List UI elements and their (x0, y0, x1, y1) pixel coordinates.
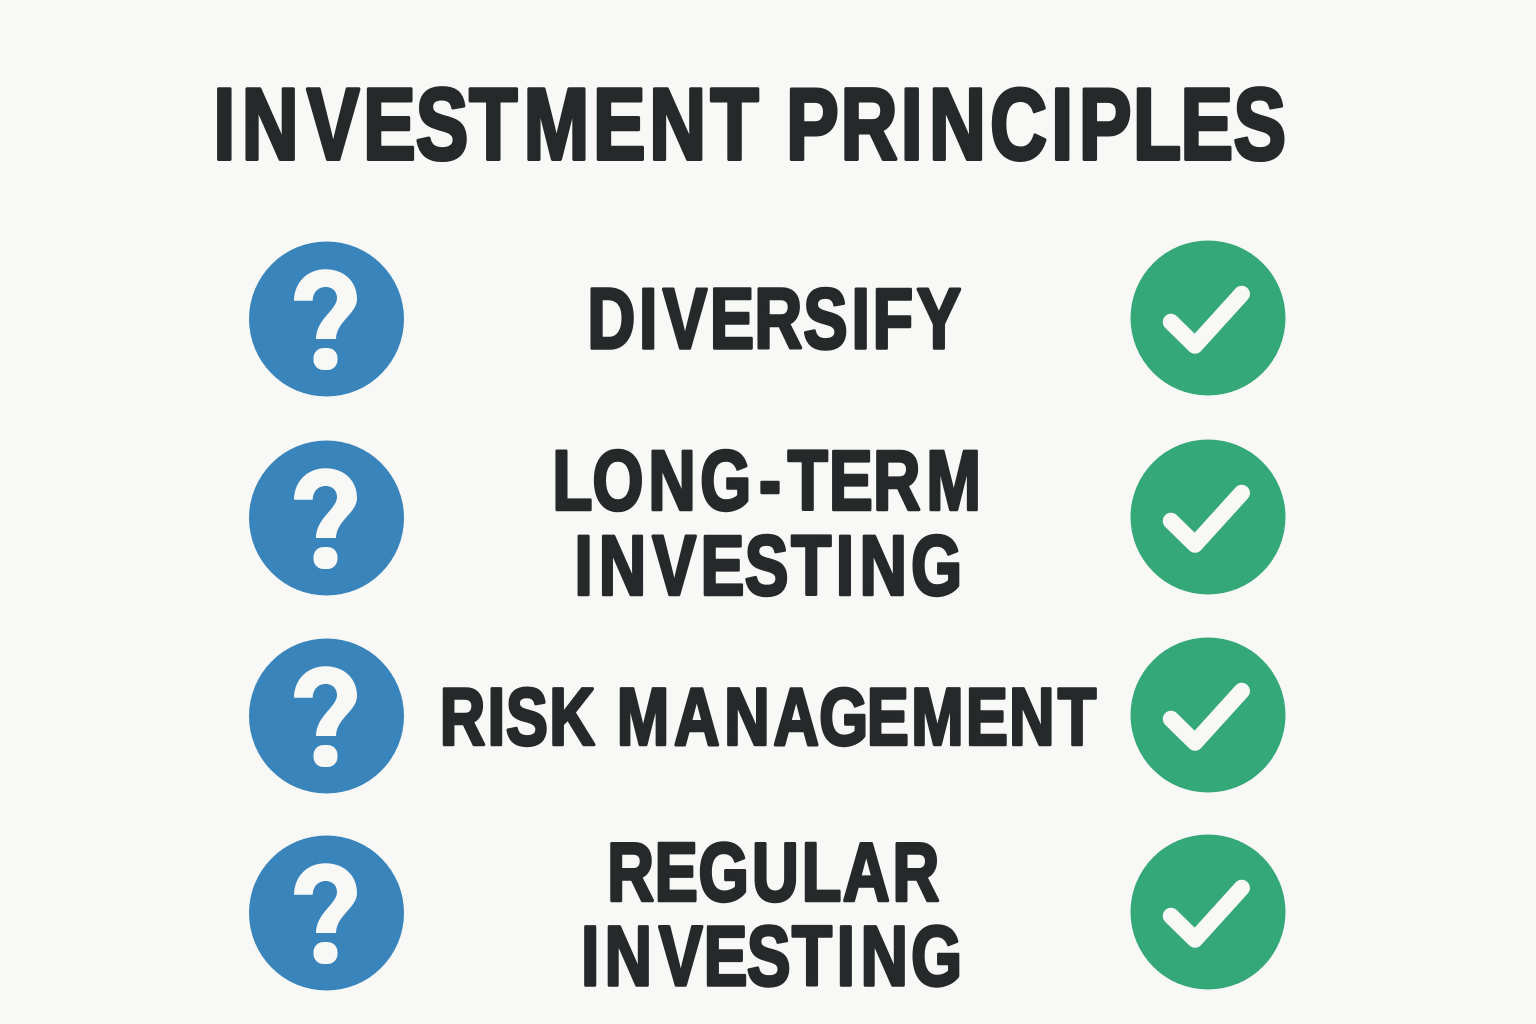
icon: check mark (1130, 440, 1286, 594)
title: INVESTMENT PRINCIPLES (213, 69, 1286, 182)
label: diversify: DIVERSIFY (587, 272, 961, 367)
row 4: regular investing (249, 826, 1286, 1003)
icon: question mark (249, 440, 404, 596)
row 3: risk management (249, 638, 1286, 794)
label: regular investing (581, 826, 962, 1003)
icon: check mark (1130, 240, 1286, 396)
icon: question mark (249, 836, 404, 990)
icon: question mark (249, 638, 404, 794)
label: long-term investing: LONG-TERM (552, 433, 981, 527)
label: regular investing: INVESTING (581, 909, 962, 1003)
label: long-term investing (552, 433, 981, 612)
label: long-term investing: INVESTING (575, 518, 962, 612)
label: risk management: RISK MANAGEMENT (440, 673, 1096, 762)
icon: check mark (1130, 638, 1286, 792)
label: regular investing: REGULAR (607, 826, 939, 918)
row 2: long-term investing (249, 433, 1286, 612)
row 1: diversify (249, 240, 1286, 396)
icon: question mark (249, 242, 404, 396)
icon: check mark (1130, 834, 1286, 990)
